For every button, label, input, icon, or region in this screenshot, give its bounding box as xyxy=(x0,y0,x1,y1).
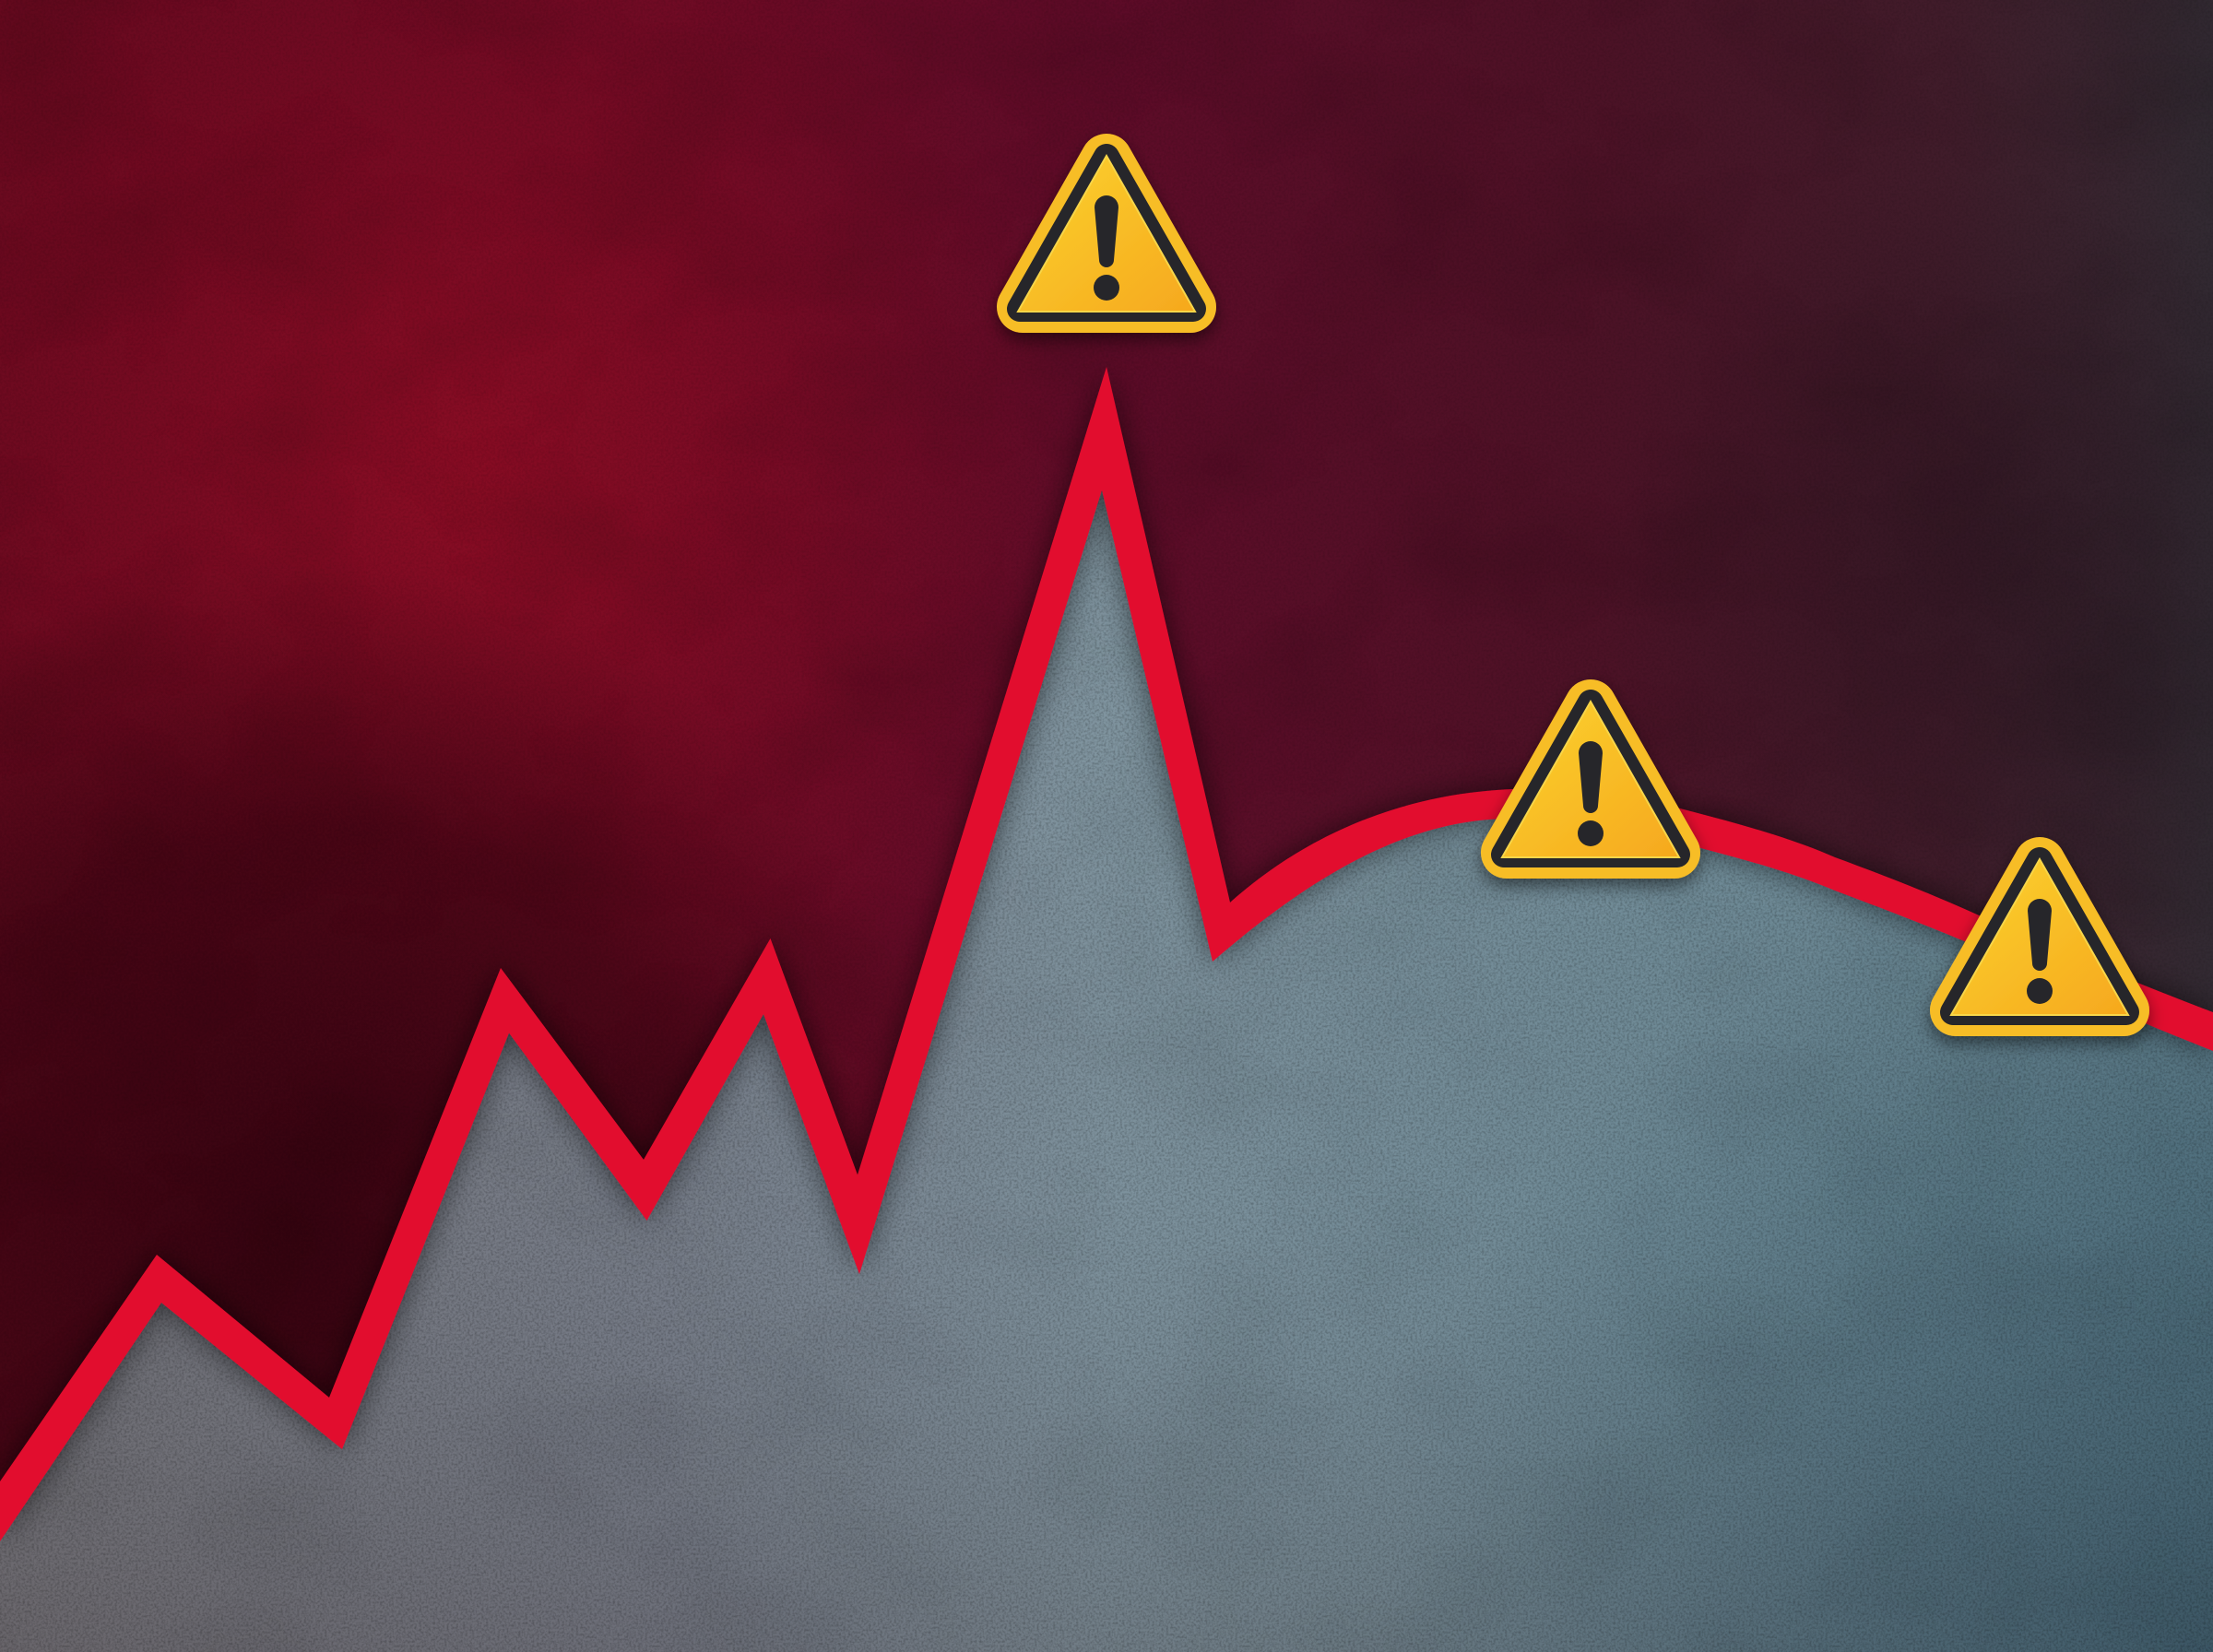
area under the line xyxy=(0,490,2213,1652)
icon: warning triangle on the plateau xyxy=(1502,702,1679,857)
icon: warning triangle at main peak xyxy=(1018,156,1195,312)
icon: warning triangle on the decline xyxy=(1951,859,2128,1015)
red volatile trend line xyxy=(0,367,2213,1541)
